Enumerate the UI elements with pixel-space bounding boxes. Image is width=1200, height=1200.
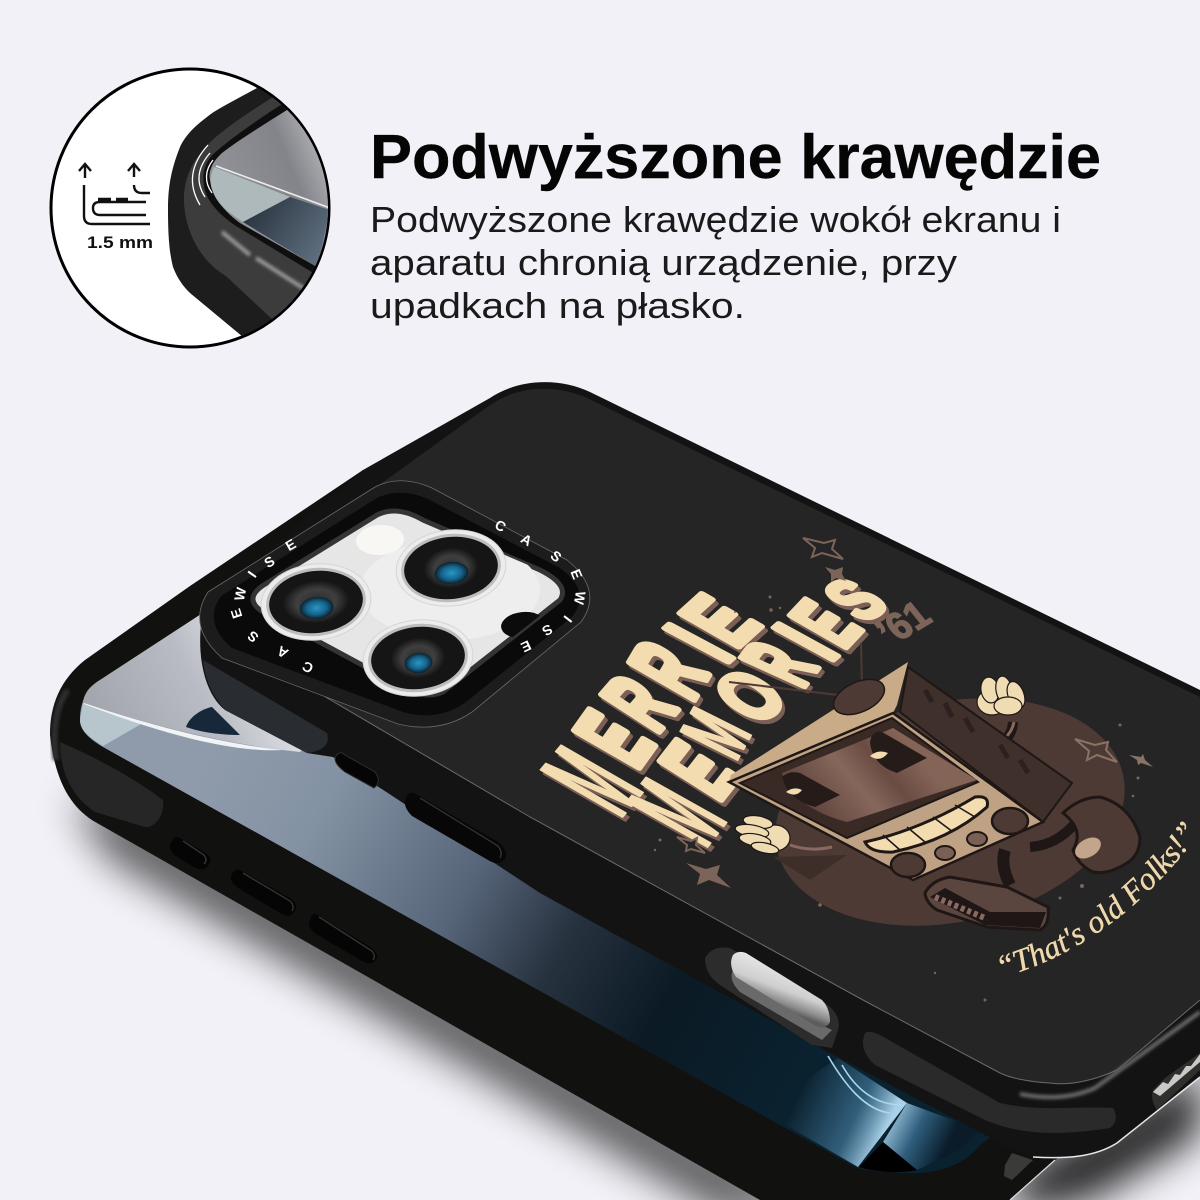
front phone case (200, 382, 1200, 1158)
back phone volume up button (231, 870, 296, 916)
body line 2: aparatu chronią urządzenie, przy (370, 242, 957, 283)
dials (891, 853, 925, 877)
CASEWISE ring lettering: S (547, 547, 565, 565)
antennas (729, 643, 862, 695)
lettering MERRIE MEMORIES: E (659, 581, 781, 660)
lettering MERRIE MEMORIES (513, 567, 905, 864)
TV side face (900, 667, 1072, 822)
shoe back (1063, 797, 1140, 873)
right fist (977, 675, 1028, 715)
back phone case (50, 470, 1100, 1200)
body line 1: Podwyższone krawędzie wokół ekranu i (370, 199, 1061, 240)
star outline left (677, 837, 705, 853)
silver side button recess (705, 947, 839, 1048)
right arm (983, 722, 1014, 747)
lettering MERRIE MEMORIES: I (643, 612, 755, 675)
CASEWISE ring lettering: I (244, 568, 260, 580)
back phone bottom right edge (1010, 1160, 1055, 1200)
corner outer frame (168, 88, 272, 336)
window contents (501, 554, 540, 637)
lettering shadow: M (604, 765, 757, 868)
microphone hole (501, 612, 540, 637)
darker backdrop sliver (773, 855, 847, 880)
impact arcs (192, 145, 213, 205)
pale wallpaper shape (80, 703, 143, 746)
left fist (734, 813, 790, 856)
case profile lens (134, 185, 150, 193)
case profile outer (84, 185, 150, 224)
front phone corner grip bottom (863, 1032, 1116, 1133)
CASEWISE ring lettering: E (567, 567, 586, 581)
lettering shadow: I (757, 616, 862, 677)
lettering MERRIE MEMORIES: S (806, 567, 905, 632)
silver side button base (732, 970, 832, 1040)
brown circle backdrop (754, 668, 1146, 956)
TV front face (729, 713, 1043, 880)
back leg arm (1030, 817, 1080, 847)
bottom port (1152, 1053, 1200, 1110)
lens top right (392, 524, 510, 612)
1.5 mm label: 1.5 mm (87, 233, 153, 252)
body line 3: upadkach na płasko. (370, 285, 745, 326)
lens bottom (359, 614, 477, 702)
lettering shadow (516, 571, 908, 868)
blue light beam right (883, 1103, 980, 1170)
star filled left (686, 863, 731, 888)
year '61: ’61 (868, 593, 940, 654)
back phone frame highlight (54, 690, 68, 760)
back phone power button (170, 837, 210, 869)
body text (370, 199, 1061, 326)
lettering MERRIE MEMORIES: E (640, 726, 759, 815)
lettering shadow: S (809, 571, 908, 636)
inset screen (210, 110, 328, 266)
leg (1003, 850, 1010, 885)
CASEWISE ring lettering: A (518, 530, 535, 549)
corner translucent band (184, 98, 315, 319)
CASEWISE ring lettering: E (518, 637, 534, 656)
inset circle: raised edge detail (51, 60, 340, 347)
star outline top (803, 538, 843, 559)
lettering shadow: E (662, 585, 784, 664)
inset dark glass (243, 197, 330, 267)
lettering MERRIE MEMORIES: E (771, 587, 881, 660)
action button (405, 793, 506, 863)
lettering MERRIE MEMORIES: M (601, 761, 754, 864)
screen wallpaper top (83, 605, 330, 752)
CASEWISE ring lettering: E (227, 607, 245, 620)
black wallpaper triangle (859, 1142, 917, 1172)
window soft reflection (504, 554, 532, 570)
lettering MERRIE MEMORIES: E (552, 695, 676, 782)
surface edge highlight (300, 682, 1200, 1084)
tagline: “That's old Folks!” (999, 822, 1186, 972)
lettering MERRIE MEMORIES: M (663, 696, 771, 772)
CASEWISE ring lettering: S (539, 621, 556, 640)
lettering shadow: R (611, 629, 732, 718)
CASEWISE ring lettering: C (299, 658, 316, 677)
drop shadows under phones (70, 800, 1200, 1200)
blue light beam left (760, 1058, 907, 1167)
speaker pill (335, 753, 378, 788)
shoe front (925, 877, 1048, 930)
front phone matte surface (215, 389, 1200, 1084)
arrow 1 (79, 164, 91, 178)
left arm (790, 845, 832, 849)
TV set (729, 643, 1072, 880)
lettering shadow: E (774, 591, 884, 664)
stars (677, 538, 1153, 888)
star filled top (825, 567, 846, 582)
CASEWISE ring lettering: W (231, 585, 249, 602)
lettering MERRIE MEMORIES: I (754, 612, 859, 673)
CASEWISE ring lettering: A (274, 643, 291, 662)
flash (355, 523, 405, 557)
inset phone corner (168, 88, 328, 336)
lettering MERRIE MEMORIES: M (513, 728, 670, 834)
TV side vents (925, 690, 1028, 773)
star filled right (1129, 754, 1153, 767)
top dial (828, 672, 890, 722)
device outline (93, 202, 146, 215)
bottom edge reflection (1033, 1077, 1200, 1158)
arrow 2 (128, 164, 140, 177)
corner gloss highlight (1020, 1012, 1200, 1097)
edge height icon (79, 164, 150, 224)
CASEWISE ring lettering: S (244, 628, 262, 646)
lettering shadow: M (516, 732, 673, 838)
smile with teeth (865, 797, 988, 852)
camera bump (200, 481, 590, 727)
lens left (257, 558, 375, 646)
lettering shadow: O (699, 660, 808, 741)
bump black ring (214, 493, 580, 715)
inset side highlight (222, 232, 303, 288)
heading: Podwyższone krawędzie (370, 123, 1101, 192)
inset white line (216, 166, 330, 208)
lettering shadow: E (643, 730, 762, 819)
lettering shadow: I (646, 616, 758, 679)
inset white disc (51, 69, 329, 347)
back phone frame (50, 470, 1100, 1200)
front phone frame (200, 382, 1200, 1157)
CASEWISE ring lettering: W (571, 590, 589, 607)
lettering MERRIE MEMORIES: O (696, 656, 805, 737)
back phone volume down button (309, 914, 377, 963)
lettering shadow: R (585, 665, 700, 750)
device buttons (98, 198, 128, 201)
lettering MERRIE MEMORIES: R (582, 661, 697, 746)
right eye (870, 732, 927, 773)
lettering shadow: R (723, 633, 841, 702)
lettering MERRIE MEMORIES: R (608, 625, 729, 714)
navy wallpaper blob (186, 707, 240, 735)
speckles (654, 596, 1140, 1002)
CASEWISE ring lettering (227, 516, 589, 677)
TV top face (729, 662, 908, 782)
CASEWISE ring lettering: S (261, 552, 278, 571)
star outline right (1075, 739, 1117, 762)
CASEWISE ring lettering: I (560, 613, 575, 626)
TV screen glass (782, 728, 977, 822)
lettering MERRIE MEMORIES: R (720, 629, 838, 698)
inset pale glass (210, 167, 290, 222)
camera window (253, 511, 562, 695)
back phone bottom port (1004, 1153, 1033, 1180)
lettering shadow: M (666, 700, 774, 776)
TV screen frame (740, 718, 978, 838)
thin wallpaper arcs (828, 1056, 904, 1113)
case artwork: Merrie Memories (513, 537, 1186, 1002)
bump outer rim (200, 481, 590, 727)
back phone screen glass (80, 605, 1000, 1173)
CASEWISE ring lettering: C (492, 516, 509, 535)
left eye (782, 772, 840, 807)
silver side button (731, 952, 830, 1027)
CASEWISE ring lettering: E (282, 535, 299, 554)
lettering shadow: E (555, 699, 679, 786)
corner dark inner rim (204, 104, 315, 272)
back phone corner grip (60, 742, 163, 827)
front phone corner grip top (203, 660, 328, 753)
